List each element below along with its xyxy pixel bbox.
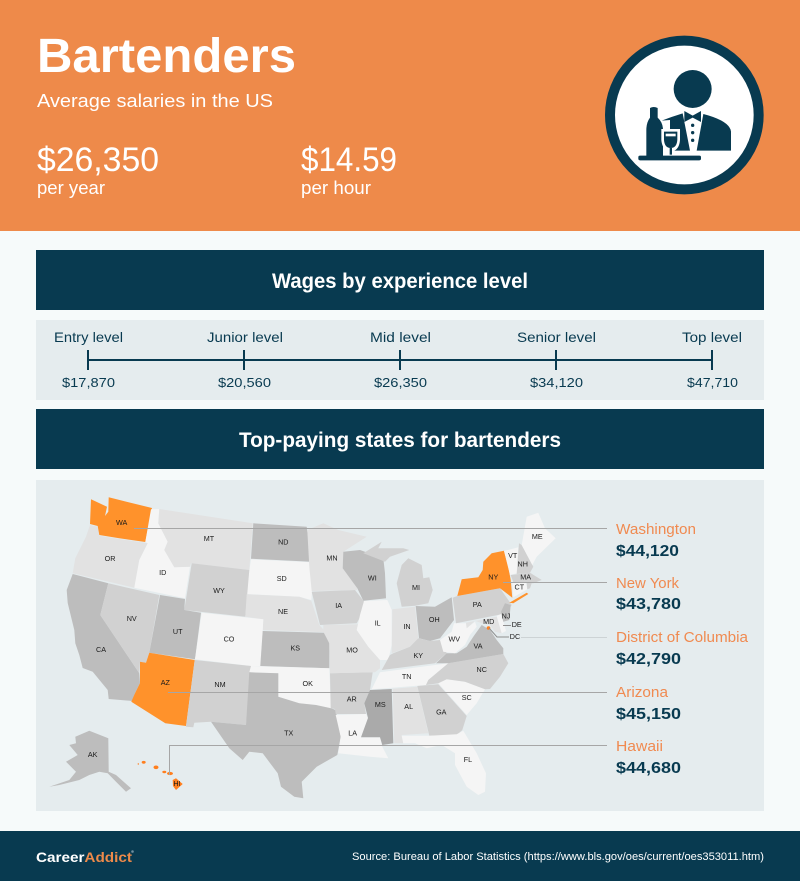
state: NM bbox=[186, 660, 251, 727]
callout: District of Columbia: $42,790 bbox=[616, 651, 681, 668]
state: CA: CA bbox=[96, 645, 106, 654]
state: NE bbox=[245, 594, 326, 632]
state: HI bbox=[138, 761, 183, 790]
state: IL: IL bbox=[375, 618, 381, 628]
heading: wages by experience level: Wages by experience level bbox=[272, 270, 528, 293]
state: MA: MA bbox=[520, 572, 531, 582]
callout: Washington bbox=[616, 522, 696, 560]
state: ID bbox=[134, 509, 190, 598]
state: AZ: AZ bbox=[161, 678, 171, 687]
state: NY: NY bbox=[488, 572, 498, 582]
senior level: $34,120 bbox=[530, 375, 583, 390]
state: ND bbox=[251, 523, 311, 562]
state: MI bbox=[363, 542, 433, 607]
state: NH: NH bbox=[518, 560, 528, 569]
callout: New York: $43,780 bbox=[616, 596, 681, 613]
entry level: $17,870 bbox=[62, 375, 115, 390]
state: AL bbox=[393, 687, 428, 743]
top level: Top level bbox=[682, 329, 742, 345]
state: KY: KY bbox=[414, 651, 423, 660]
heading: top-paying states: Top-paying states for bartenders bbox=[239, 429, 561, 452]
state: ME bbox=[522, 513, 556, 565]
state: IA: IA bbox=[335, 601, 342, 610]
state: AR: AR bbox=[347, 694, 357, 704]
state: VT: VT bbox=[508, 551, 518, 560]
state: WI: WI bbox=[368, 574, 377, 582]
leader lines bbox=[134, 528, 607, 775]
state: NJ bbox=[501, 603, 511, 622]
state: TX: TX bbox=[284, 728, 293, 738]
state: WA: WA bbox=[116, 518, 128, 527]
state: MT bbox=[158, 509, 253, 570]
state: MD bbox=[466, 617, 502, 633]
footer bbox=[0, 831, 800, 881]
state: OK bbox=[249, 666, 331, 708]
state: MN: MN bbox=[326, 554, 338, 563]
state: OR: OR bbox=[105, 554, 115, 563]
title: Bartenders bbox=[37, 30, 296, 83]
state: AZ bbox=[131, 653, 195, 726]
timeline axis bbox=[88, 350, 712, 370]
state: FL: FL bbox=[464, 755, 472, 764]
hourly salary: $14.59 bbox=[301, 141, 397, 179]
state: WI bbox=[343, 550, 386, 601]
yearly salary bbox=[37, 141, 159, 198]
state: MA bbox=[511, 572, 542, 583]
state: FL bbox=[402, 731, 486, 795]
state: MD: MD bbox=[483, 617, 494, 626]
state: UT bbox=[149, 595, 201, 659]
callout: Washington: $44,120 bbox=[616, 543, 679, 560]
state: WA bbox=[90, 497, 152, 542]
panel: wage timeline bbox=[36, 320, 764, 400]
panel: map of top-paying states bbox=[36, 480, 764, 811]
callout: New York: New York bbox=[616, 576, 680, 592]
entry level bbox=[54, 329, 123, 390]
state: GA bbox=[417, 684, 467, 736]
state: MS bbox=[361, 689, 393, 745]
state: SD: SD bbox=[277, 574, 287, 583]
callout: Washington: Washington bbox=[616, 522, 696, 538]
state: NC bbox=[426, 654, 508, 689]
mid level bbox=[370, 329, 431, 390]
mid level: Mid level bbox=[370, 329, 431, 345]
state: OK: OK bbox=[303, 679, 313, 688]
source: Source: Bureau of Labor Statistics (https://www.bls.gov/oes/current/oes353011.htm) bbox=[352, 851, 764, 863]
state: MT: MT bbox=[204, 534, 215, 543]
state: MO: MO bbox=[346, 646, 358, 655]
junior level: $20,560 bbox=[218, 375, 271, 390]
entry level: Entry level bbox=[54, 329, 123, 345]
state: DE: DE bbox=[512, 620, 522, 629]
hourly salary bbox=[301, 141, 397, 198]
state: SC: SC bbox=[462, 693, 472, 702]
top level: $47,710 bbox=[687, 375, 738, 390]
state: KS bbox=[260, 631, 329, 668]
state: CT bbox=[512, 582, 527, 597]
logo: CareerAddict: Career Addict bbox=[36, 849, 132, 865]
state: WY: WY bbox=[213, 586, 225, 595]
state: IA bbox=[312, 590, 367, 625]
state: HI: HI bbox=[173, 779, 181, 788]
state: NC: NC bbox=[477, 665, 487, 674]
callout: Hawaii: $44,680 bbox=[616, 760, 681, 777]
junior level bbox=[207, 329, 283, 390]
state: CT: CT bbox=[515, 582, 525, 592]
callout: District of Columbia bbox=[616, 630, 749, 668]
state: AR bbox=[330, 672, 373, 714]
state: KS: KS bbox=[291, 644, 300, 653]
state: SD bbox=[246, 559, 313, 600]
state: UT: UT bbox=[173, 627, 183, 636]
heading: wages by experience level bbox=[36, 250, 764, 310]
callout: Arizona: Arizona bbox=[616, 685, 669, 701]
callout: New York bbox=[616, 576, 681, 613]
state: CO bbox=[195, 613, 263, 666]
state: PA bbox=[453, 588, 512, 623]
mid level: $26,350 bbox=[374, 375, 427, 390]
state: MI: MI bbox=[412, 583, 420, 592]
hourly salary: per hour bbox=[301, 178, 371, 198]
subtitle: Average salaries in the US bbox=[37, 91, 273, 111]
state: ND: ND bbox=[278, 538, 288, 546]
state: CA bbox=[67, 574, 140, 701]
state: VT bbox=[504, 547, 518, 575]
state: NV: NV bbox=[127, 614, 137, 623]
state: GA: GA bbox=[436, 708, 447, 717]
senior level: Senior level bbox=[517, 329, 596, 345]
state: IL bbox=[357, 600, 392, 660]
yearly salary: per year bbox=[37, 178, 105, 198]
state: CO: CO bbox=[224, 634, 235, 644]
state: AK: AK bbox=[88, 750, 98, 759]
senior level bbox=[517, 329, 596, 390]
yearly salary: $26,350 bbox=[37, 141, 159, 179]
junior level: Junior level bbox=[207, 329, 283, 345]
state: AL: AL bbox=[404, 702, 413, 711]
state: NV bbox=[100, 583, 159, 673]
top level bbox=[682, 329, 742, 390]
state: NH bbox=[517, 543, 533, 574]
state: IN: IN bbox=[403, 622, 411, 631]
state: TN: TN bbox=[402, 672, 411, 681]
callout: District of Columbia: District of Columbia bbox=[616, 630, 749, 646]
state: WV bbox=[440, 622, 477, 653]
callout: Arizona bbox=[616, 685, 681, 723]
state: VA: VA bbox=[473, 642, 483, 650]
state: ID: ID bbox=[159, 568, 166, 577]
state: LA bbox=[336, 714, 388, 758]
state: MS: MS bbox=[375, 700, 386, 709]
callout: Arizona: $45,150 bbox=[616, 706, 681, 723]
state: TN bbox=[372, 663, 448, 689]
state: TX bbox=[211, 672, 341, 798]
callout: Hawaii bbox=[616, 739, 681, 777]
header panel bbox=[0, 0, 800, 231]
state: DE bbox=[497, 614, 522, 633]
state: NY bbox=[457, 551, 528, 603]
state: RI bbox=[527, 583, 532, 589]
heading: top-paying states bbox=[36, 409, 764, 469]
state: OR bbox=[73, 525, 148, 588]
state: PA: PA bbox=[473, 600, 482, 609]
state: NM: NM bbox=[214, 680, 226, 689]
state: LA: LA bbox=[348, 728, 357, 738]
state: KY bbox=[382, 638, 447, 670]
label: DC: DC bbox=[510, 632, 520, 641]
state: MN bbox=[307, 523, 367, 591]
state: NE: NE bbox=[278, 607, 288, 616]
state: AK bbox=[49, 731, 131, 792]
state: SC bbox=[438, 679, 485, 715]
callout: Hawaii: Hawaii bbox=[616, 739, 663, 755]
state: WV: WV bbox=[449, 635, 460, 644]
state: WY bbox=[184, 563, 249, 617]
state: VA bbox=[436, 625, 503, 663]
state: ME: ME bbox=[532, 532, 543, 541]
state: IN bbox=[392, 607, 418, 653]
icon: bartender bbox=[610, 41, 759, 189]
state: MO bbox=[323, 624, 380, 673]
state: NJ: NJ bbox=[502, 612, 511, 620]
state: OH bbox=[416, 597, 454, 641]
state: OH: OH bbox=[429, 615, 440, 624]
marker: DC bbox=[487, 626, 490, 630]
